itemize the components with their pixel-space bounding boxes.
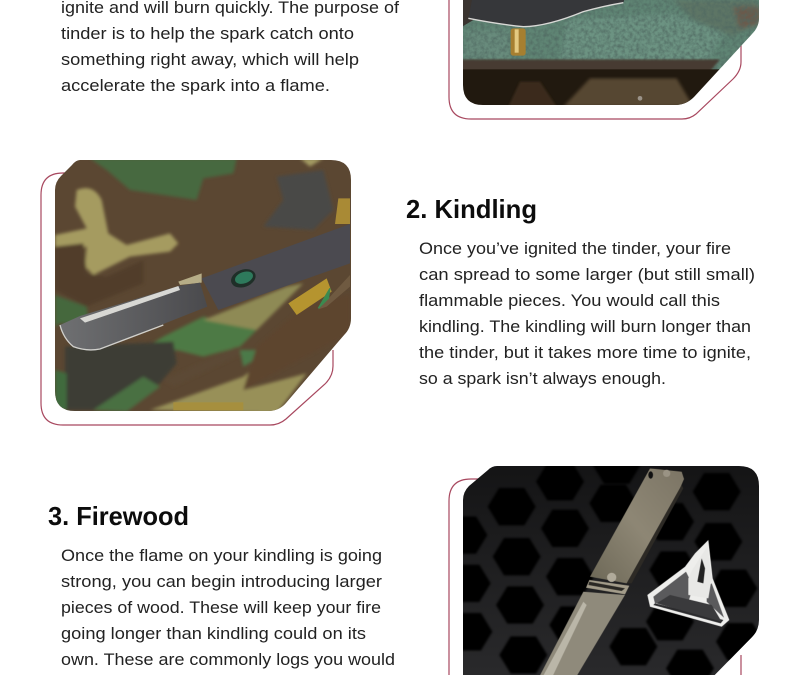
- paragraph: kindling: Once you’ve ignited the tinder, your fire: [419, 239, 731, 258]
- camouflage shapes: [55, 158, 350, 413]
- section 2: kindling text: [406, 194, 755, 388]
- paragraph: kindling: flammable pieces. You would call this: [419, 291, 720, 310]
- section 1: tinder text: [61, 0, 399, 95]
- paragraph: kindling: the tinder, but it takes more time to ignite,: [419, 343, 751, 362]
- section 1: tinder text: tinder is to help the spark catch onto: [61, 24, 354, 43]
- heading: kindling: 2. Kindling: [406, 194, 537, 224]
- section 1: tinder text: something right away, which will help: [61, 50, 359, 69]
- paragraph: firewood: [61, 546, 395, 669]
- section 1: tinder text: accelerate the spark into a flame.: [61, 76, 330, 95]
- bullets: [173, 198, 350, 410]
- paragraph: firewood: own. These are commonly logs you would: [61, 650, 395, 669]
- rocket patch: [647, 540, 729, 627]
- paragraph: firewood: pieces of wood. These will keep your fire: [61, 598, 381, 617]
- knife: [537, 468, 684, 675]
- paragraph: kindling: kindling. The kindling will burn longer than: [419, 317, 751, 336]
- panel: tinder knife photo: [449, 0, 760, 119]
- section 3: firewood text: [48, 501, 395, 669]
- panel: firewood knife photo on hexagon mesh: [448, 466, 759, 675]
- panel: kindling knife photo on camouflage: [41, 158, 353, 425]
- knife: [60, 224, 350, 350]
- paragraph: kindling: can spread to some larger (but still small): [419, 265, 755, 284]
- heading: firewood: 3. Firewood: [48, 501, 189, 531]
- paragraph: firewood: strong, you can begin introducing larger: [61, 572, 382, 591]
- paragraph: kindling: [419, 239, 755, 388]
- paragraph: firewood: Once the flame on your kindling is going: [61, 546, 382, 565]
- paragraph: kindling: so a spark isn’t always enough.: [419, 369, 666, 388]
- hexagon mesh: [463, 466, 758, 675]
- paragraph: firewood: going longer than kindling could on its: [61, 624, 366, 643]
